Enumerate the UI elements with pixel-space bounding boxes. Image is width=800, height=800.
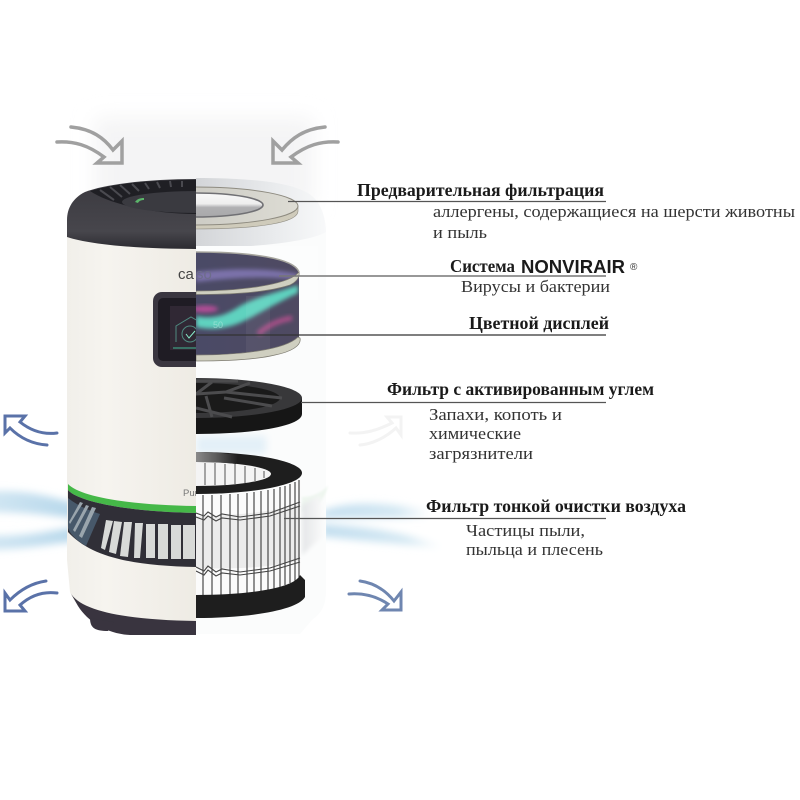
display: [153, 292, 196, 367]
silver band top: [196, 272, 299, 294]
inner back pleats: [196, 452, 302, 494]
ghost right half of purifier body: [196, 178, 326, 554]
label: activated carbon filter: загрязнители: [429, 444, 533, 463]
faint display reading: 50: [213, 320, 223, 330]
label: fine air filter: Частицы пыли,: [466, 521, 585, 540]
brand text: ca: [178, 266, 194, 283]
arrow: top left: [57, 127, 122, 163]
label: prefiltration: и пыль: [433, 223, 487, 242]
pleat cylinder: [196, 478, 301, 596]
label: activated carbon filter: Запахи, копоть и: [429, 405, 562, 424]
dark filter band: [68, 490, 196, 567]
label: fine air filter: пыльца и плесень: [466, 540, 603, 559]
label: NONVIRAIR system: Вирусы и бактерии: [461, 277, 610, 296]
bottom ring: [196, 575, 305, 618]
arrow: lower left outflow: [5, 581, 57, 611]
silver band bottom: [196, 337, 300, 361]
foot: [90, 620, 108, 631]
disc: NONVIRAIR cylinder: [192, 252, 300, 361]
airflow streaks right: [320, 504, 445, 548]
arrow: lower right outflow: [349, 581, 401, 610]
background mist above the purifier: [95, 118, 313, 208]
disc: activated carbon filter: [196, 378, 302, 434]
label: NONVIRAIR system: NONVIRAIR: [521, 257, 625, 277]
purifier left half: [67, 179, 196, 635]
top rim: [196, 252, 299, 272]
airflow streaks left: [0, 491, 85, 550]
disc: prefilter: [196, 186, 298, 230]
arrow: faint upper right: [350, 417, 401, 445]
top dark cap: [67, 179, 196, 249]
pleat lines: [203, 480, 299, 596]
label: NONVIRAIR system: [450, 256, 638, 296]
base: [70, 592, 196, 635]
disc: HEPA filter: [196, 452, 305, 618]
label: activated carbon filter: Фильтр с активированным углем: [387, 379, 654, 399]
label: prefiltration: [357, 180, 796, 242]
label: fine air filter: [426, 496, 686, 559]
label: prefiltration: аллергены, содержащиеся на шерсти животны: [433, 202, 796, 221]
top intake grille: [90, 180, 196, 214]
label: NONVIRAIR system: ®: [630, 262, 638, 273]
leader lines: [195, 202, 606, 518]
arrow: upper left outflow: [5, 416, 57, 445]
label: fine air filter: Фильтр тонкой очистки воздуха: [426, 496, 686, 516]
display icon: [176, 316, 196, 342]
pleats: [101, 520, 195, 559]
aurora graphics: [192, 266, 298, 352]
zigzag wires: [196, 502, 300, 576]
label: prefiltration: Предварительная фильтрация: [357, 180, 604, 200]
label: NONVIRAIR system: Система: [450, 256, 515, 276]
green LED ring: [68, 484, 196, 513]
arrow: top right: [273, 127, 338, 163]
faint brand continuation: so: [196, 266, 212, 283]
label: activated carbon filter: химические: [429, 424, 521, 443]
cream body: [67, 220, 196, 634]
control panel disc: [122, 191, 196, 213]
Pur label: Pur: [183, 488, 198, 499]
label: activated carbon filter: [387, 379, 654, 463]
label: color display: Цветной дисплей: [469, 313, 609, 333]
